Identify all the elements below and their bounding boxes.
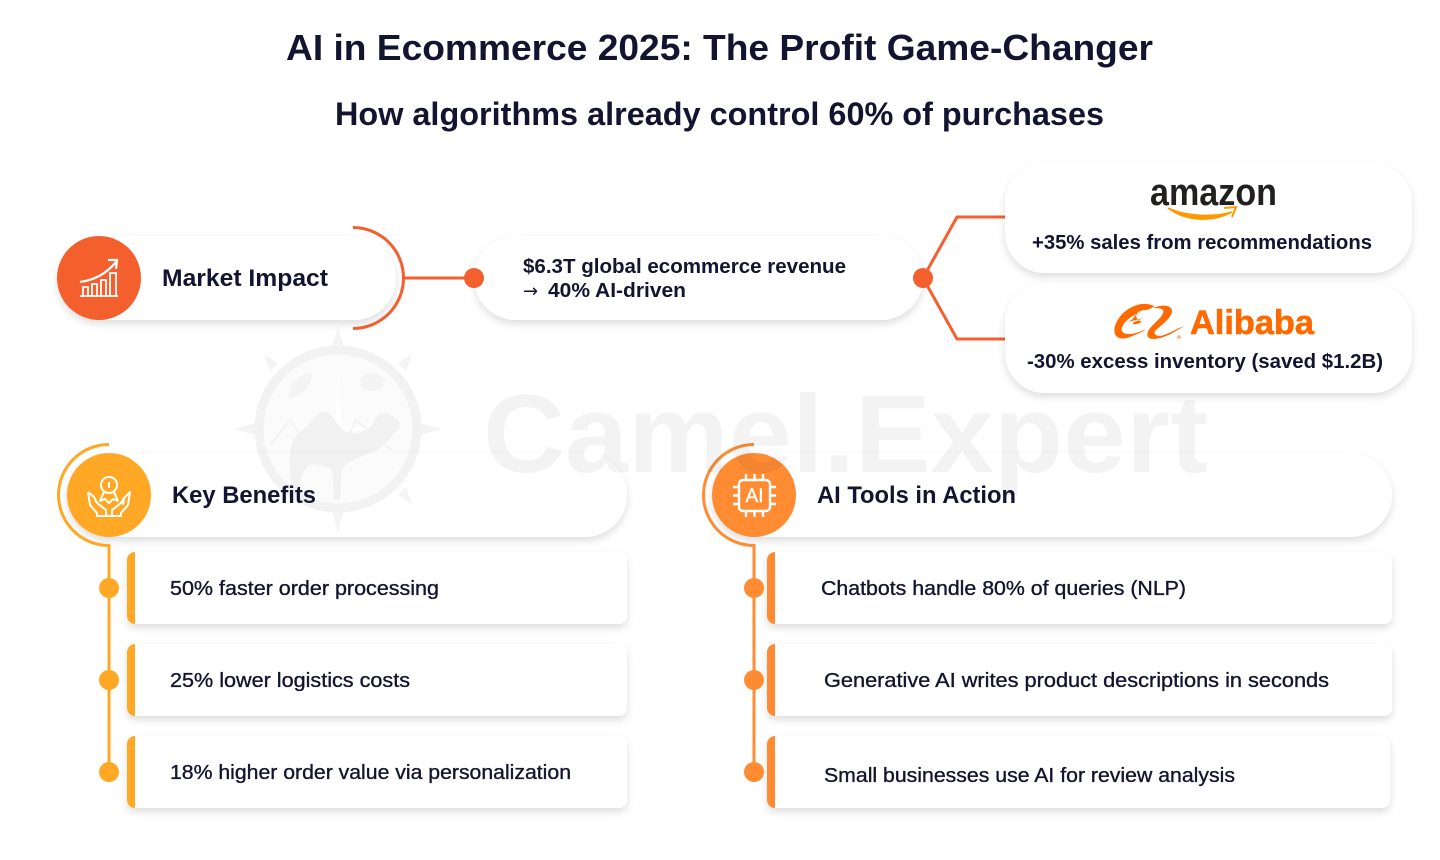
tool: chatbots — [744, 552, 1392, 624]
benefit: higher order value — [99, 736, 627, 808]
tool: review analysis: Small businesses use AI for review analysis — [824, 765, 1235, 787]
connector: revenue branches — [464, 217, 1006, 339]
tool: chatbots: Chatbots handle 80% of queries (NLP) — [821, 578, 1186, 600]
logo: alibaba: Alibaba — [1190, 304, 1315, 342]
icon: hands with medal — [88, 477, 130, 516]
panel: ai tools — [704, 444, 1392, 808]
panel: key benefits — [58, 444, 627, 808]
panel: market impact — [57, 228, 474, 328]
market impact icon circle — [57, 236, 141, 320]
benefit: faster processing: 50% faster order processing — [170, 578, 439, 600]
revenue text: 40% AI-driven — [548, 280, 686, 302]
logo: amazon: amazon — [1150, 172, 1277, 214]
logo: alibaba — [1114, 304, 1315, 342]
title: AI in Ecommerce 2025: The Profit Game-Changer — [286, 27, 1153, 68]
tool: review analysis — [744, 736, 1390, 808]
ai tools header — [704, 444, 1392, 772]
icon: growth chart — [80, 260, 118, 296]
tool: generative ai — [744, 644, 1392, 716]
icon: ai chip — [733, 474, 776, 517]
panel: global revenue — [474, 236, 923, 320]
amazon stat: +35% sales from recommendations — [1032, 232, 1372, 254]
revenue text: → — [523, 281, 538, 302]
heading: key benefits: Key Benefits — [172, 482, 316, 509]
watermark: camel.expert text: Camel.Expert — [483, 373, 1208, 496]
benefit: lower logistics: 25% lower logistics costs — [170, 670, 410, 692]
panel: amazon — [1005, 163, 1412, 273]
panel: alibaba — [1005, 283, 1412, 393]
revenue text: $6.3T global ecommerce revenue — [523, 256, 846, 278]
heading: ai tools: AI Tools in Action — [817, 482, 1016, 509]
alibaba stat: -30% excess inventory (saved $1.2B) — [1027, 351, 1383, 373]
heading: market impact: Market Impact — [162, 265, 328, 292]
icon: ai chip: AI — [746, 486, 763, 507]
benefit: faster processing — [99, 552, 627, 624]
watermark: compass and camel — [233, 325, 443, 533]
subtitle: How algorithms already control 60% of purchases — [335, 96, 1104, 132]
key benefits header — [58, 444, 627, 772]
market impact arc and connector — [353, 228, 474, 328]
benefit: lower logistics — [99, 644, 627, 716]
tool: generative ai: Generative AI writes product descriptions in seconds — [824, 670, 1329, 692]
benefit: higher order value: 18% higher order value via personalization — [170, 762, 571, 784]
